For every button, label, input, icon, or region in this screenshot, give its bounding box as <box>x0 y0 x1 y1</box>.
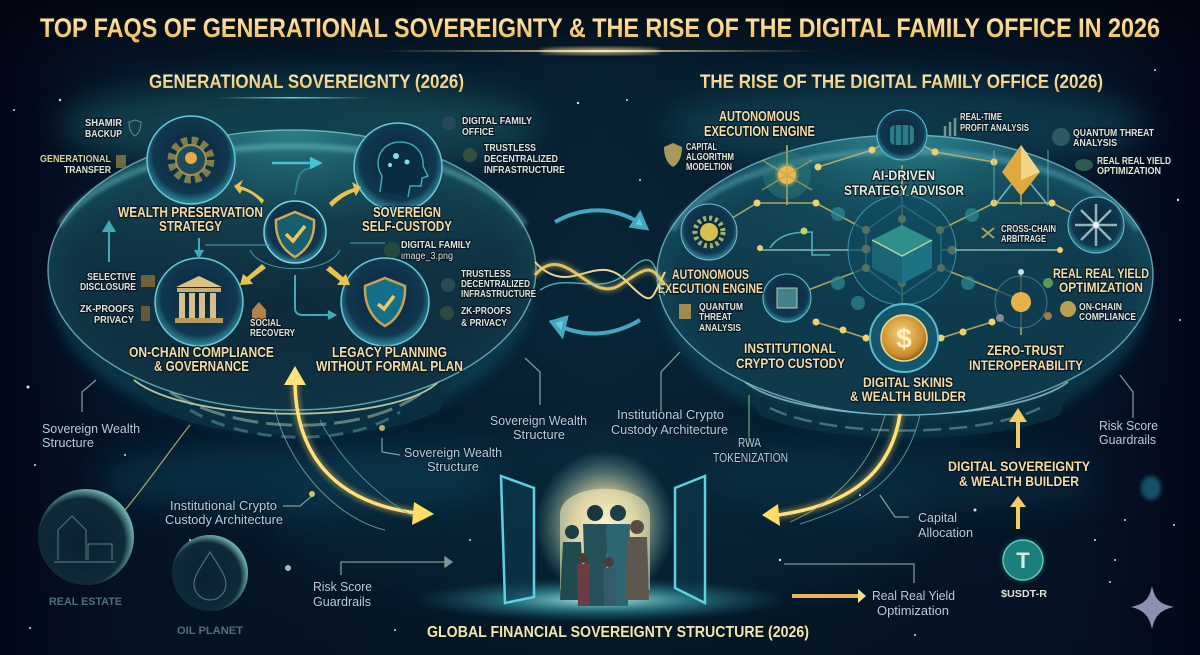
label: institutional crypto custody: INSTITUTIONAL <box>744 340 836 356</box>
label: quantum threat analysis top <box>1052 128 1154 149</box>
label: zero-trust interoperability <box>969 342 1084 373</box>
label: selective disclosure <box>80 272 155 293</box>
node: ether diamond <box>994 145 1048 205</box>
network nodes <box>754 146 1063 342</box>
label: capital allocation modeltion <box>664 142 734 173</box>
label: digital family image: image_3.png <box>401 251 453 262</box>
label: rwa tokenization: TOKENIZATION <box>713 450 788 465</box>
label: ai-driven strategy advisor <box>844 167 964 198</box>
label: social recovery: RECOVERY <box>250 328 295 339</box>
label: quantum threat analysis lower: QUANTUM <box>699 302 743 313</box>
callout leaders <box>82 352 1133 583</box>
sphere: central shield <box>250 201 340 269</box>
gateway: doors and family <box>410 450 790 622</box>
label: autonomous execution engine lower: AUTONOMOUS <box>672 266 749 282</box>
label: sovereign wealth structure right: Sovereign Wealth <box>490 413 587 428</box>
label: wealth preservation strategy <box>118 204 263 235</box>
label: wealth preservation strategy: WEALTH PRESERVATION <box>118 204 263 221</box>
label: autonomous execution engine lower: EXECUTION ENGINE <box>658 280 763 296</box>
label: digital skinis and wealth builder: & WEALTH BUILDER <box>850 388 966 404</box>
label: sovereign wealth structure right <box>490 413 587 442</box>
label: digital family office <box>442 116 532 138</box>
label: on-chain compliance: COMPLIANCE <box>1079 312 1136 323</box>
label: real real yield optimization top: OPTIMIZATION <box>1097 166 1161 177</box>
label: digital sovereignty and wealth builder: & WEALTH BUILDER <box>959 473 1079 489</box>
label: legacy planning <box>316 344 463 375</box>
label: autonomous execution engine top <box>704 108 815 140</box>
sphere: sovereign self custody head <box>354 123 442 211</box>
label: real-time profit analysis: REAL-TIME <box>960 112 1002 123</box>
label: digital family office: OFFICE <box>462 127 494 138</box>
label: trustless decentralized infrastructure <box>463 143 565 176</box>
label: capital allocation modeltion: ALGORITHM <box>686 152 734 163</box>
label: sovereign wealth structure left: Structure <box>42 435 94 450</box>
label: sovereign wealth structure mid <box>404 445 502 474</box>
label: zero-trust interoperability: INTEROPERABILITY <box>969 357 1084 373</box>
label: on-chain compliance: ON-CHAIN <box>1079 302 1122 313</box>
label: risk score guardrails right <box>1099 418 1158 447</box>
label: on-chain compliance <box>1060 301 1136 323</box>
label: shamir backup: SHAMIR <box>85 118 123 129</box>
label: ai-driven strategy advisor: STRATEGY ADVISOR <box>844 182 964 198</box>
label: trustless infrastructure lower: DECENTRALIZED <box>461 279 530 290</box>
label: zk-proofs and privacy: & PRIVACY <box>461 318 507 329</box>
sphere: on-chain bank <box>155 258 243 346</box>
caption: global financial sovereignty structure: GLOBAL FINANCIAL SOVEREIGNTY STRUCTURE (2026) <box>427 624 809 641</box>
label: capital allocation modeltion: CAPITAL <box>686 142 717 153</box>
label: ai-driven strategy advisor: AI-DRIVEN <box>872 167 935 183</box>
label: sovereign wealth structure mid: Sovereign Wealth <box>404 445 502 460</box>
label: risk score guardrails right: Risk Score <box>1099 418 1158 433</box>
node: custody chip <box>763 274 811 322</box>
left disc <box>48 130 536 410</box>
icon: sparkle watermark <box>1131 586 1174 629</box>
label: zk-proofs privacy: PRIVACY <box>94 315 134 326</box>
label: cross-chain arbitrage: ARBITRAGE <box>1001 234 1046 245</box>
label: institutional crypto custody architecture left <box>165 498 283 527</box>
label: digital skinis and wealth builder: DIGITAL SKINIS <box>863 374 953 390</box>
label: risk score guardrails left <box>313 579 372 609</box>
label: quantum threat analysis top: ANALYSIS <box>1073 138 1117 149</box>
label: rwa tokenization <box>713 395 788 465</box>
label: capital allocation: Allocation <box>918 525 973 540</box>
label: zk-proofs privacy: ZK-PROOFS <box>80 304 134 315</box>
arrows: cyan side <box>103 168 385 319</box>
icon: oil planet <box>172 535 248 637</box>
small teal chips <box>831 207 979 310</box>
label: institutional crypto custody architecture right: Custody Architecture <box>611 422 728 437</box>
label: zk-proofs and privacy <box>440 306 511 329</box>
label: real real yield optimization: REAL REAL YIELD <box>1053 265 1149 281</box>
node: gold engine left <box>762 145 812 205</box>
network connections <box>709 135 1096 340</box>
arrows: cyan flow between panels <box>552 210 646 335</box>
panel: generational sovereignty <box>40 72 565 437</box>
label: social recovery: SOCIAL <box>250 318 281 329</box>
label: institutional crypto custody: CRYPTO CUSTODY <box>736 355 846 371</box>
label: real-time profit analysis <box>945 112 1029 136</box>
label: institutional crypto custody <box>736 340 846 371</box>
label: quantum threat analysis lower <box>679 302 743 334</box>
label: autonomous execution engine top: EXECUTION ENGINE <box>704 123 815 140</box>
panel: digital family office <box>657 72 1171 438</box>
label: trustless decentralized infrastructure: TRUSTLESS <box>484 143 536 154</box>
icon: planet real estate: REAL ESTATE <box>49 596 122 608</box>
label: legacy planning: LEGACY PLANNING <box>332 344 447 361</box>
label: social recovery <box>250 302 295 339</box>
label: sovereign wealth structure left: Sovereign Wealth <box>42 421 140 436</box>
label: risk score guardrails right: Guardrails <box>1099 432 1156 447</box>
label: trustless infrastructure lower: INFRASTRUCTURE <box>461 289 536 300</box>
arrow: cyan top <box>272 158 320 168</box>
label: real real yield optimization top: REAL REAL YIELD <box>1097 156 1171 167</box>
node: right hub circle <box>1068 197 1124 253</box>
icon: usdt coin: $USDT-R <box>1001 589 1048 600</box>
central cube <box>848 195 956 305</box>
right disc rim <box>661 156 1149 438</box>
label: sovereign wealth structure right: Structure <box>513 427 565 442</box>
label: on-chain compliance and governance <box>129 344 274 375</box>
label: shamir backup: BACKUP <box>85 129 122 140</box>
left disc rim <box>52 152 532 437</box>
label: on-chain compliance and governance: & GOVERNANCE <box>154 358 249 375</box>
label: capital allocation: Capital <box>918 510 957 525</box>
label: sovereign self-custody: SOVEREIGN <box>373 204 441 221</box>
label: selective disclosure: DISCLOSURE <box>80 282 136 293</box>
label: real real yield optimization <box>1053 265 1149 295</box>
label: generational transfer: TRANSFER <box>64 165 112 176</box>
label: real real yield optimization bottom <box>872 588 955 618</box>
label: generational transfer <box>40 154 126 176</box>
label: generational transfer: GENERATIONAL <box>40 154 111 165</box>
sphere: wealth preservation gear <box>147 116 235 204</box>
label: institutional crypto custody architecture right: Institutional Crypto <box>617 407 724 422</box>
label: risk score guardrails left: Risk Score <box>313 579 372 594</box>
label: quantum threat analysis top: QUANTUM THREAT <box>1073 128 1154 139</box>
label: quantum threat analysis lower: THREAT <box>699 312 732 323</box>
label: sovereign self-custody: SELF-CUSTODY <box>362 218 452 235</box>
label: capital allocation modeltion: MODELTION <box>686 162 732 173</box>
label: digital family image <box>384 240 471 262</box>
label: real real yield optimization bottom: Optimization <box>877 603 949 618</box>
label: wealth preservation strategy: STRATEGY <box>159 218 222 235</box>
label: zk-proofs privacy <box>80 304 150 326</box>
right disc <box>657 135 1153 415</box>
label: cross-chain arbitrage: CROSS-CHAIN <box>1001 224 1056 235</box>
icon: planet real estate <box>38 489 134 608</box>
label: digital family image: DIGITAL FAMILY <box>401 240 471 251</box>
label: autonomous execution engine lower <box>658 266 763 296</box>
label: quantum threat analysis lower: ANALYSIS <box>699 323 741 334</box>
label: zero-trust interoperability: ZERO-TRUST <box>987 342 1064 358</box>
label: digital sovereignty and wealth builder <box>948 458 1091 489</box>
label: cross-chain arbitrage <box>982 224 1056 245</box>
label: rwa tokenization: RWA <box>738 435 761 450</box>
node: dollar coin <box>870 304 938 372</box>
label: on-chain compliance and governance: ON-CHAIN COMPLIANCE <box>129 344 274 361</box>
heading: generational sovereignty: GENERATIONAL SOVEREIGNTY (2026) <box>149 72 464 93</box>
label: digital sovereignty and wealth builder: DIGITAL SOVEREIGNTY <box>948 458 1091 474</box>
node: hex interoperability <box>995 269 1053 328</box>
icon: usdt coin <box>1001 538 1048 600</box>
node: ai strategy top globe <box>877 110 927 160</box>
label: risk score guardrails left: Guardrails <box>313 594 371 609</box>
label: trustless infrastructure lower: TRUSTLESS <box>461 269 511 280</box>
label: selective disclosure: SELECTIVE <box>87 272 136 283</box>
label: real real yield optimization top <box>1075 156 1171 177</box>
node: dollar coin: $ <box>896 323 912 354</box>
node: left sun circle <box>681 204 737 260</box>
arrow: gold to real yield <box>792 589 866 603</box>
label: real real yield optimization bottom: Real Real Yield <box>872 588 955 603</box>
label: capital allocation <box>918 510 973 540</box>
label: trustless decentralized infrastructure: INFRASTRUCTURE <box>484 165 565 176</box>
arrows: gold around shield <box>234 180 361 285</box>
family silhouettes <box>560 505 649 606</box>
icon: usdt coin: T <box>1016 548 1030 573</box>
label: sovereign wealth structure mid: Structure <box>427 459 479 474</box>
label: institutional crypto custody architecture left: Custody Architecture <box>165 512 283 527</box>
label: autonomous execution engine top: AUTONOMOUS <box>719 108 800 125</box>
label: legacy planning: WITHOUT FORMAL PLAN <box>316 358 463 375</box>
icon: oil planet: OIL PLANET <box>177 625 243 637</box>
label: real real yield optimization: OPTIMIZATION <box>1059 279 1143 295</box>
label: digital family office: DIGITAL FAMILY <box>462 116 532 127</box>
arrow: gold up stack <box>1009 408 1027 529</box>
sphere: legacy planning shield <box>341 258 429 346</box>
label: trustless decentralized infrastructure: DECENTRALIZED <box>484 154 558 165</box>
label: zk-proofs and privacy: ZK-PROOFS <box>461 306 511 317</box>
label: sovereign wealth structure left <box>42 421 140 450</box>
label: digital skinis and wealth builder <box>850 374 966 404</box>
label: sovereign self-custody <box>362 204 452 235</box>
label: real-time profit analysis: PROFIT ANALYSIS <box>960 123 1029 134</box>
heading: digital family office: THE RISE OF THE DIGITAL FAMILY OFFICE (2026) <box>700 72 1103 93</box>
label: institutional crypto custody architecture left: Institutional Crypto <box>170 498 277 513</box>
arrow: gold curve left <box>275 366 434 530</box>
label: shamir backup <box>85 118 141 140</box>
gold energy weave <box>535 260 665 298</box>
label: trustless infrastructure lower <box>441 269 536 300</box>
arrow: gold curve right <box>762 414 920 526</box>
label: institutional crypto custody architecture right <box>611 407 728 437</box>
